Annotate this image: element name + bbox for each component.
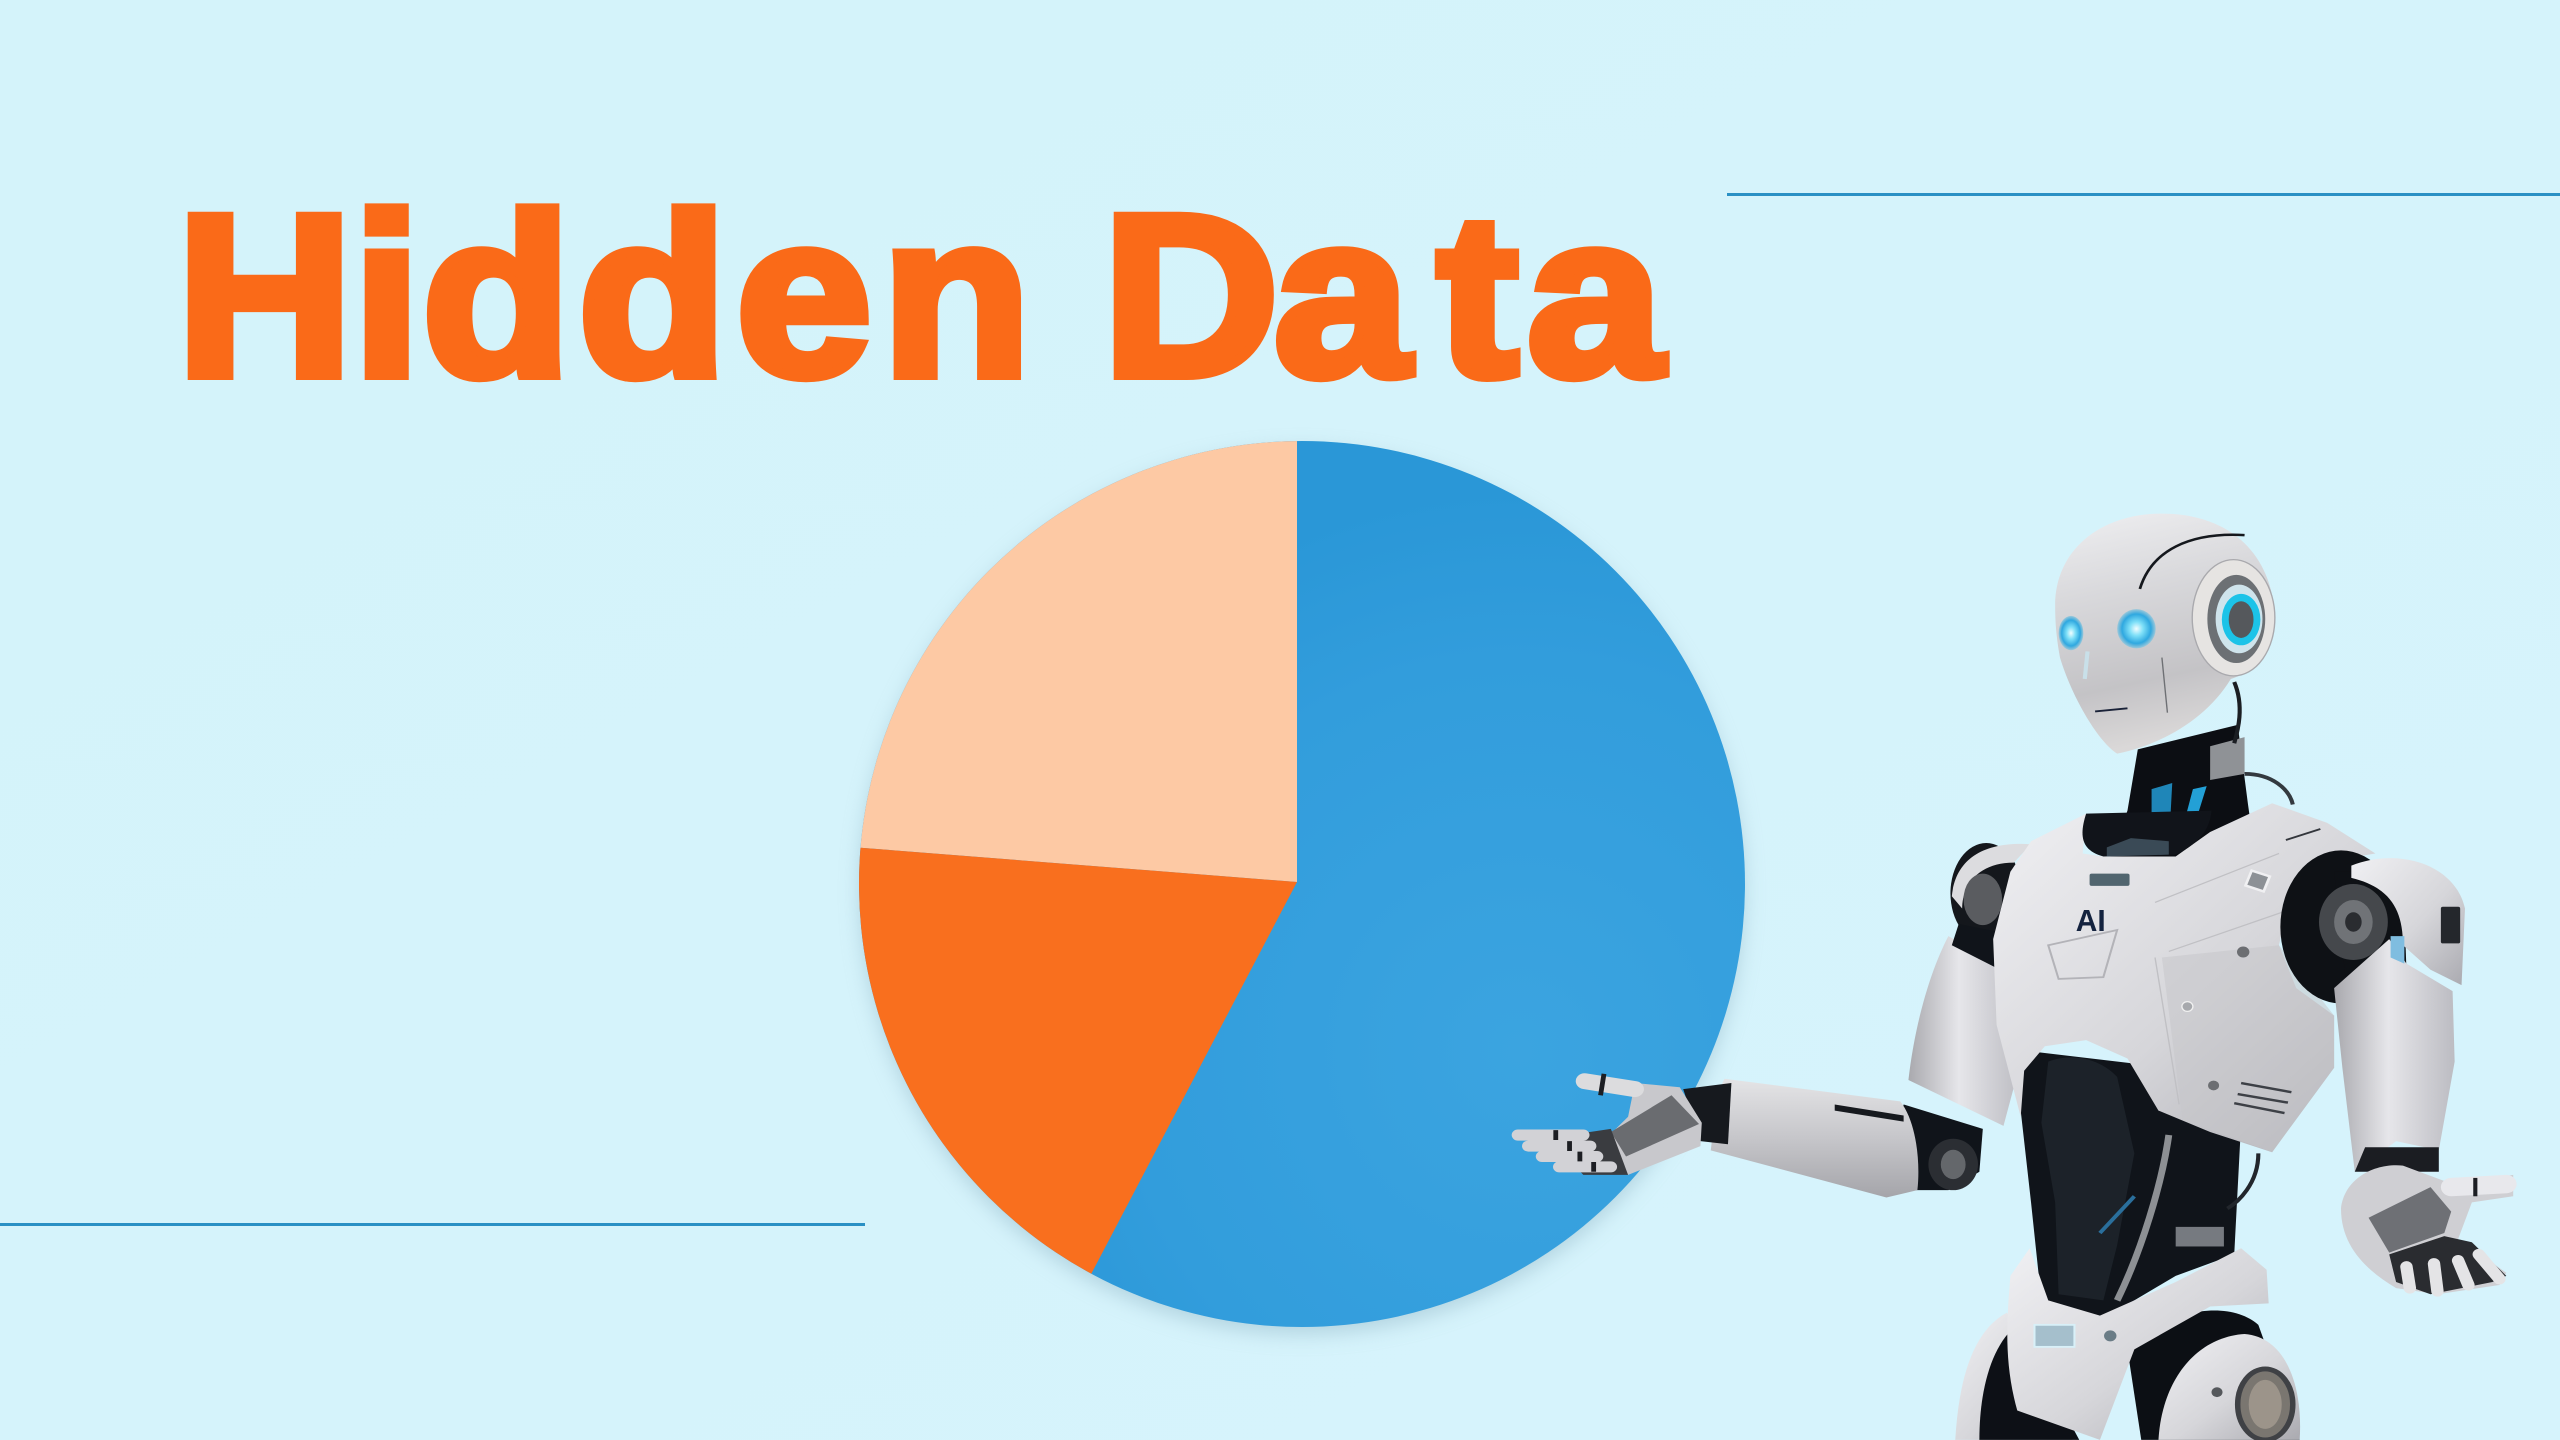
pie chart xyxy=(853,441,1751,1341)
robot neck xyxy=(2110,682,2293,860)
robot torso xyxy=(1993,803,2375,1152)
robot eyes xyxy=(2059,616,2083,650)
pie shadow xyxy=(860,450,1744,1334)
slice: orange xyxy=(859,848,1297,1274)
robot pelvis xyxy=(2007,1248,2269,1440)
robot near upper arm xyxy=(2334,858,2465,1172)
robot left leg xyxy=(1955,1313,2079,1440)
robot extended hand xyxy=(1518,1074,1731,1175)
top right line xyxy=(1727,193,2560,196)
slice: peach xyxy=(860,441,1297,882)
bottom left line xyxy=(0,1223,865,1226)
robot near hand xyxy=(2341,1165,2513,1294)
robot hip joint xyxy=(2127,1311,2300,1440)
robot abdomen xyxy=(2014,1049,2258,1319)
robot near shoulder joint xyxy=(2280,850,2406,1003)
robot far upper arm xyxy=(1908,843,2031,1126)
slice: blue xyxy=(859,441,1745,1327)
robot ear ring xyxy=(2192,560,2275,676)
robot mouth xyxy=(2095,708,2127,711)
robot near thigh xyxy=(2158,1334,2300,1440)
robot xyxy=(1518,514,2513,1440)
robot chest label: AI xyxy=(2076,905,2106,938)
robot head xyxy=(2055,514,2275,754)
title: Hidden Data xyxy=(177,167,1665,424)
robot extended forearm xyxy=(1711,1079,1983,1197)
